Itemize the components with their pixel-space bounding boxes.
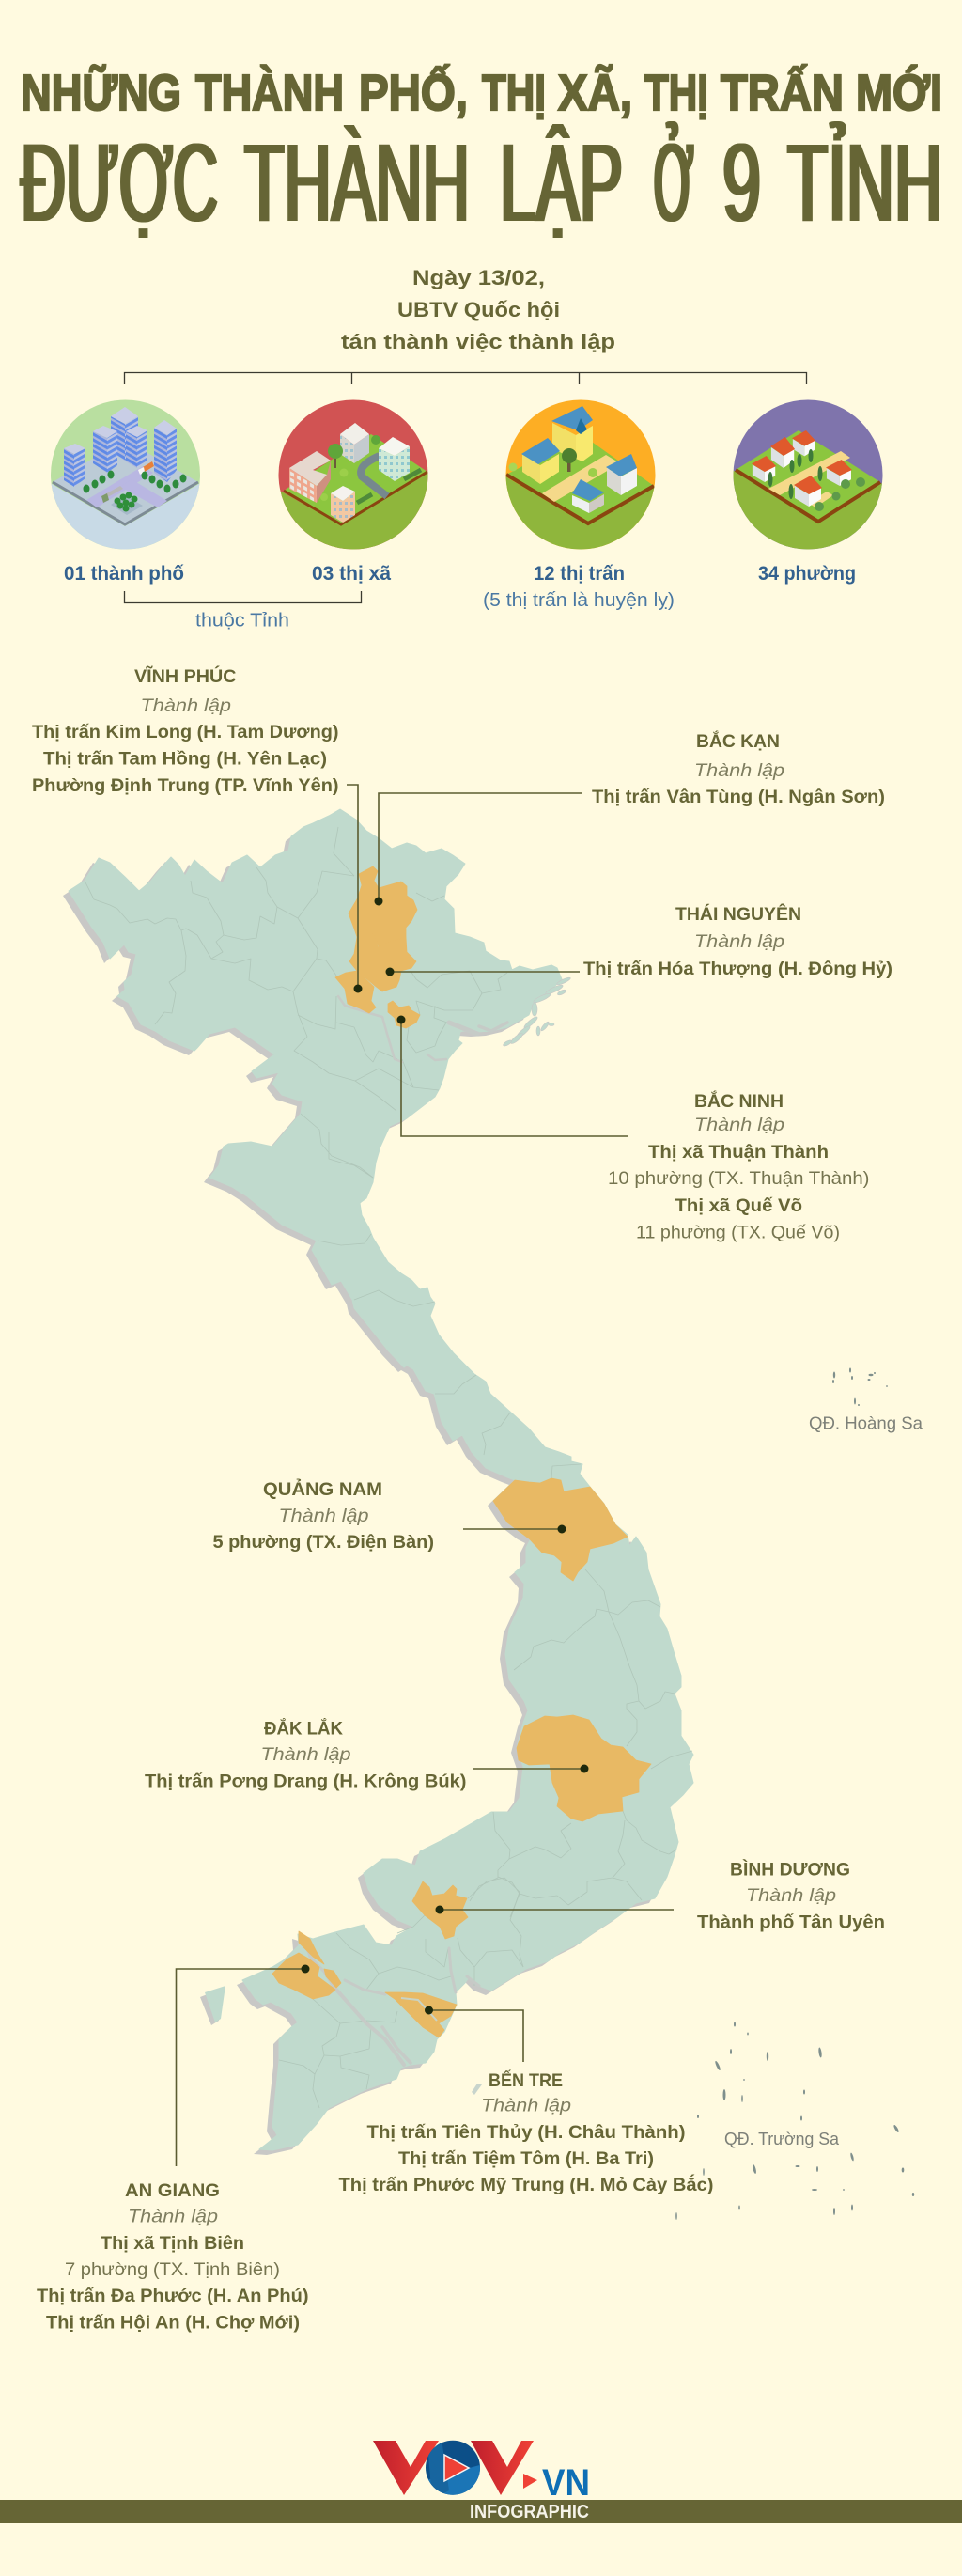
title line 1: PHỐ,: [359, 65, 468, 121]
province: Bến Tre: [385, 1992, 457, 2037]
text: Đắk Lắk: ĐẮK LẮK: [264, 1716, 343, 1739]
province: Bắc Kạn: [349, 866, 417, 947]
leader: Bến Tre: [425, 2006, 523, 2062]
province borders: [85, 827, 692, 2108]
text: Vĩnh Phúc: Phường Định Trung (TP. Vĩnh Yên): [32, 775, 338, 796]
text: Bình Dương: Thành phố Tân Uyên: [697, 1912, 885, 1932]
title line 2: Ở: [654, 120, 693, 245]
text: An Giang: Thị trấn Đa Phước (H. An Phú): [37, 2286, 308, 2306]
text: Bến Tre: Thị trấn Tiệm Tôm (H. Ba Tri): [398, 2148, 654, 2169]
intro text: [341, 266, 615, 353]
text: Bắc Ninh: Thị xã Thuận Thành: [648, 1142, 829, 1163]
footer bar: [0, 2500, 962, 2523]
title line 1: THÀNH: [195, 65, 344, 121]
text: Vĩnh Phúc: Thị trấn Kim Long (H. Tam Dương): [32, 722, 338, 742]
icon: town with yellow houses: [505, 400, 656, 549]
text: Vĩnh Phúc: Thị trấn Tam Hồng (H. Yên Lạc): [43, 748, 327, 769]
text: Bắc Ninh: [608, 1089, 870, 1242]
icon: ward with red-roofed houses: [733, 400, 883, 549]
text: Bắc Ninh: Thành lập: [694, 1115, 784, 1135]
map of Vietnam: [63, 809, 693, 2155]
text: Bến Tre: Thị trấn Tiên Thủy (H. Châu Thành): [366, 2122, 686, 2143]
title line 2: LẬP: [500, 121, 623, 245]
title line 1: MỚI: [856, 65, 942, 121]
text: Đắk Lắk: Thị trấn Pơng Drang (H. Krông Búk): [145, 1771, 466, 1791]
note: thuộc Tỉnh: thuộc Tỉnh: [195, 611, 289, 632]
rivers: [303, 996, 507, 2065]
province: Đắk Lắk: [517, 1715, 651, 1821]
text: Bến Tre: BẾN TRE: [489, 2069, 563, 2091]
text: An Giang: [37, 2180, 308, 2333]
leader: Bắc Ninh: [396, 1015, 628, 1136]
text: Vĩnh Phúc: VĨNH PHÚC: [134, 664, 237, 687]
islands: [200, 976, 571, 2095]
bracket connecting categories: [124, 372, 806, 384]
text: Bắc Ninh: Thị xã Quế Võ: [675, 1195, 802, 1216]
text: Bắc Kạn: Thị trấn Vân Tùng (H. Ngân Sơn): [592, 787, 885, 807]
text: Quảng Nam: 5 phường (TX. Điện Bàn): [212, 1532, 434, 1553]
intro text: Ngày 13/02,: [412, 266, 545, 289]
text: Bến Tre: [338, 2069, 714, 2195]
province: Bình Dương: [412, 1881, 468, 1939]
text: Bến Tre: Thị trấn Phước Mỹ Trung (H. Mỏ Cày Bắc): [338, 2173, 714, 2195]
text: Bình Dương: [697, 1859, 885, 1932]
note: thuộc Tỉnh: [124, 591, 361, 632]
text: Thái Nguyên: THÁI NGUYÊN: [675, 902, 801, 925]
archipelago: Trường Sa: [675, 2022, 914, 2220]
text: Vĩnh Phúc: [32, 664, 338, 796]
label: 03 thị xã: 03 thị xã: [312, 563, 391, 585]
title line 1: [21, 65, 942, 121]
text: Bắc Kạn: [592, 729, 885, 807]
title line 1: TRẤN: [721, 65, 844, 121]
title: [21, 65, 942, 245]
logo: VOV.VN: VN: [542, 2462, 590, 2504]
text: Thái Nguyên: [583, 902, 892, 979]
archipelago: Hoàng Sa: QĐ. Hoàng Sa: [809, 1413, 923, 1432]
title line 2: ĐƯỢC: [21, 121, 218, 245]
label: 34 phường: 34 phường: [758, 563, 856, 585]
archipelago: Hoàng Sa: [809, 1368, 923, 1432]
title line 1: NHỮNG: [21, 65, 181, 121]
leader: Đắk Lắk: [473, 1765, 588, 1772]
title line 1: THỊ: [482, 65, 546, 121]
note: huyện lỵ: (5 thị trấn là huyện lỵ): [483, 590, 675, 611]
text: Quảng Nam: QUẢNG NAM: [263, 1478, 382, 1500]
leader: Bình Dương: [436, 1906, 674, 1913]
text: Quảng Nam: Thành lập: [278, 1506, 369, 1526]
text: Đắk Lắk: Thành lập: [261, 1744, 351, 1765]
label: 01 thành phố: 01 thành phố: [64, 563, 184, 585]
title line 2: THÀNH: [244, 121, 470, 245]
text: Bắc Kạn: BẮC KẠN: [696, 729, 780, 752]
title line 1: THỊ: [644, 65, 708, 121]
intro text: tán thành việc thành lập: [341, 330, 615, 353]
text: Bình Dương: BÌNH DƯƠNG: [730, 1859, 850, 1880]
text: An Giang: 7 phường (TX. Tịnh Biên): [65, 2259, 280, 2280]
province: Bắc Ninh: [388, 1001, 420, 1028]
label: 12 thị trấn: 12 thị trấn: [534, 563, 625, 585]
text: Vĩnh Phúc: Thành lập: [141, 695, 231, 716]
map shadow: [63, 814, 688, 2155]
map land: [69, 809, 693, 2150]
leader: An Giang: [177, 1964, 310, 2166]
leader: Bắc Kạn: [374, 793, 582, 906]
icon: town with apartment blocks: [278, 400, 428, 549]
text: Bình Dương: Thành lập: [746, 1885, 836, 1906]
title line 2: [21, 120, 942, 245]
province: Thái Nguyên: [349, 929, 416, 991]
text: Bắc Ninh: 11 phường (TX. Quế Võ): [636, 1222, 840, 1242]
text: An Giang: Thành lập: [128, 2207, 218, 2227]
title line 2: 9: [722, 121, 761, 245]
text: Thái Nguyên: Thành lập: [694, 931, 784, 952]
text: An Giang: AN GIANG: [125, 2180, 220, 2201]
province: An Giang: [272, 1931, 341, 1999]
text: Bắc Ninh: BẮC NINH: [694, 1089, 784, 1112]
text: Bắc Ninh: 10 phường (TX. Thuận Thành): [608, 1168, 870, 1189]
leader: Thái Nguyên: [385, 968, 580, 976]
text: Thái Nguyên: Thị trấn Hóa Thượng (H. Đông Hỷ): [583, 959, 892, 979]
icon: city: [51, 400, 200, 549]
text: Bến Tre: Thành lập: [481, 2096, 571, 2116]
text: Bắc Kạn: Thành lập: [694, 760, 784, 781]
intro text: UBTV Quốc hội: [397, 298, 560, 321]
text: An Giang: Thị trấn Hội An (H. Chợ Mới): [46, 2312, 300, 2333]
text: An Giang: Thị xã Tịnh Biên: [101, 2233, 244, 2254]
text: Đắk Lắk: [145, 1716, 466, 1791]
text: Quảng Nam: [212, 1478, 434, 1553]
leader: Quảng Nam: [463, 1524, 566, 1534]
category labels: [64, 563, 856, 632]
logo: VOV.VN: [373, 2440, 588, 2495]
province: Quảng Nam: [493, 1478, 628, 1581]
title line 1: XÃ,: [558, 65, 632, 121]
footer bar: INFOGRAPHIC: [470, 2502, 589, 2522]
archipelago: Trường Sa: QĐ. Trường Sa: [724, 2129, 840, 2148]
province: Vĩnh Phúc: [335, 971, 376, 1013]
leader: Vĩnh Phúc: [347, 785, 363, 992]
